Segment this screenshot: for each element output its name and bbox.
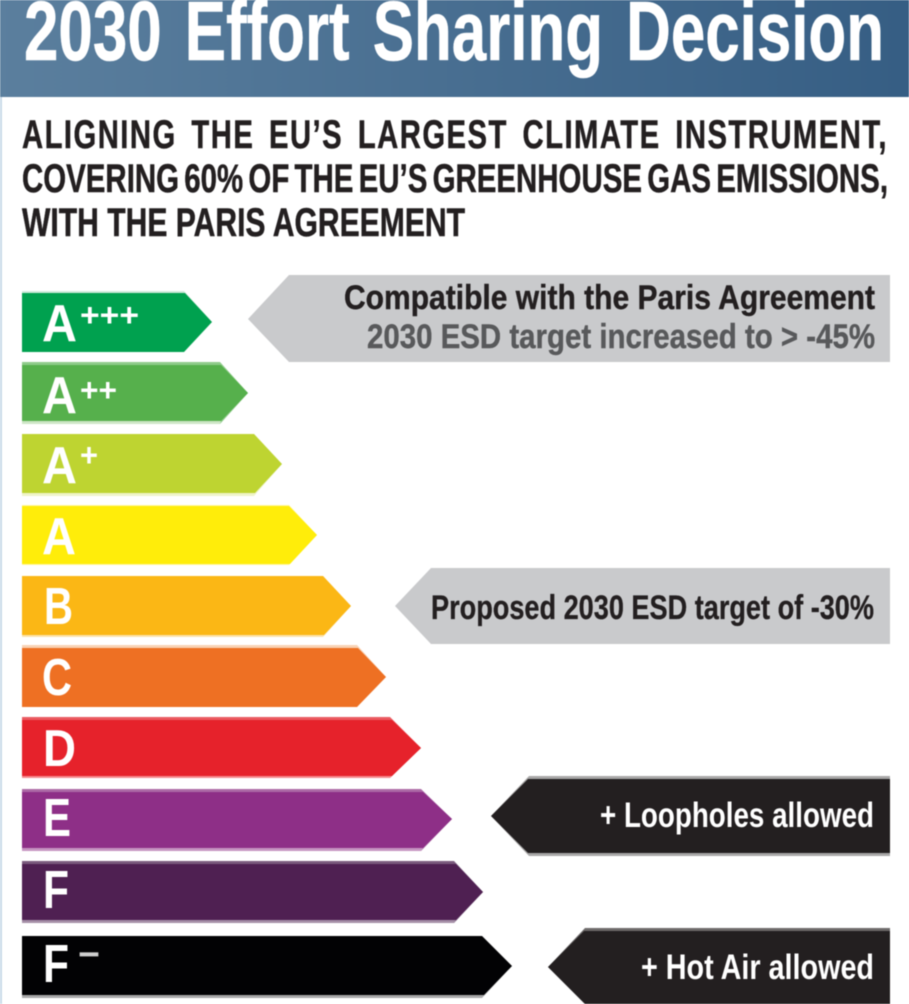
rating arrow: F minus: [22, 934, 512, 998]
rating arrow: A+++: [22, 291, 212, 353]
rating arrow: E: [22, 788, 452, 851]
rating arrow: D: D: [43, 720, 76, 778]
rating arrow: A++: A: [42, 367, 77, 425]
subtitle: [22, 113, 888, 245]
rating arrow: A++: [22, 362, 248, 425]
rating arrow: F minus: –: [79, 934, 99, 970]
rating arrow: C: [22, 645, 386, 707]
callout: hot air allowed: [548, 928, 890, 1004]
header banner: [0, 0, 909, 97]
callout: loopholes allowed: [491, 776, 890, 856]
rating arrow: E: E: [43, 788, 71, 848]
rating arrow: B: B: [44, 578, 73, 636]
rating arrow: A++: ++: [80, 372, 117, 408]
callout: compatible with the Paris Agreement: [248, 275, 890, 362]
rating arrow: F: [22, 860, 483, 923]
callout: proposed target: [395, 568, 890, 644]
rating arrow: B: [22, 576, 351, 637]
rating arrow: A+: A: [42, 437, 77, 495]
rating arrow: F minus: F: [43, 934, 69, 994]
subtitle: WITH THE PARIS AGREEMENT: [22, 201, 465, 245]
rating arrow: A+++: +++: [80, 297, 139, 333]
rating arrow: A: [22, 505, 317, 566]
rating arrow: A+++: A: [42, 295, 77, 353]
rating arrow: A+: [22, 434, 282, 496]
rating arrow: C: C: [42, 649, 72, 707]
left edge strip: [0, 97, 2, 1004]
rating arrow: A: A: [42, 508, 76, 566]
rating arrow: F: F: [43, 860, 69, 920]
rating arrow: D: [22, 717, 421, 778]
rating arrow: A+: +: [80, 437, 98, 473]
